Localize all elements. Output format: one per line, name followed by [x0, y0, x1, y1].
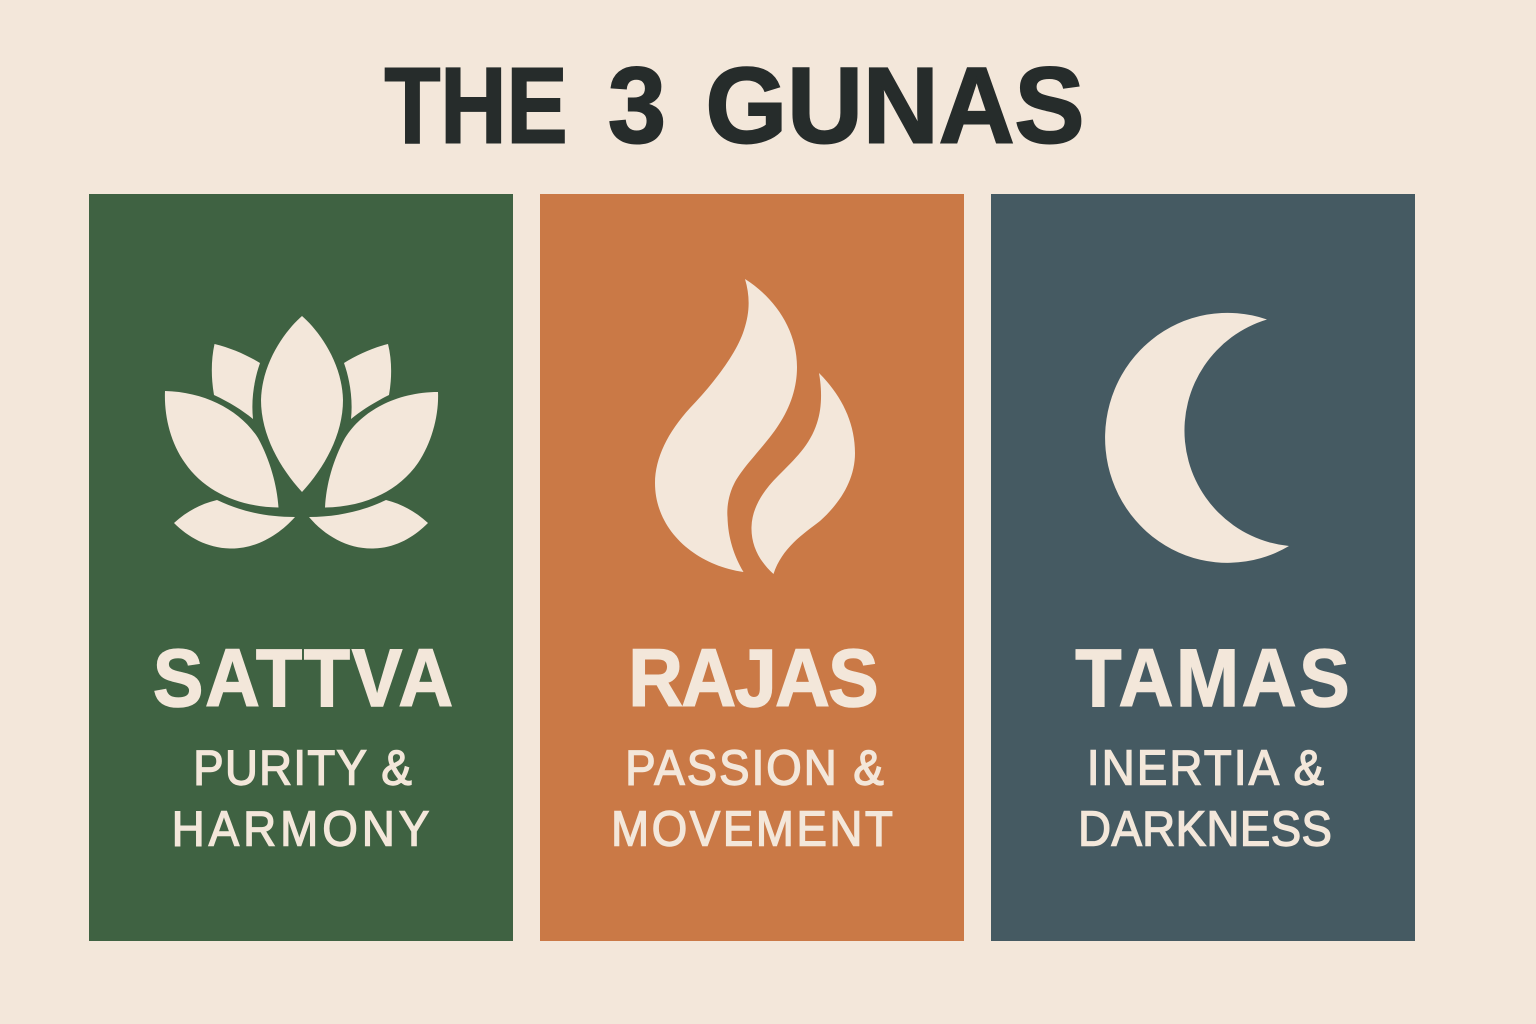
text: purity and harmony: [172, 741, 429, 857]
panel: rajas: [540, 194, 964, 941]
text: passion and movement: [611, 741, 893, 857]
text: inertia and darkness: [1078, 741, 1332, 857]
title: 3: [608, 44, 666, 166]
text: passion and movement: PASSION &: [625, 741, 884, 796]
heading: sattva: SATTVA: [153, 632, 453, 724]
heading: tamas: TAMAS: [1075, 632, 1350, 724]
text: inertia and darkness: INERTIA &: [1087, 741, 1324, 796]
text: purity and harmony: HARMONY: [172, 802, 429, 857]
title: GUNAS: [706, 44, 1084, 166]
icon: crescent moon: [1105, 313, 1289, 563]
text: purity and harmony: PURITY &: [193, 741, 412, 796]
panel: tamas: [991, 194, 1415, 941]
title: [384, 44, 1084, 166]
icon: lotus: [165, 316, 438, 549]
title: THE: [384, 44, 568, 166]
panel: sattva: [89, 194, 513, 941]
text: passion and movement: MOVEMENT: [611, 802, 893, 857]
text: inertia and darkness: DARKNESS: [1078, 802, 1332, 857]
icon: flame: [655, 279, 855, 574]
heading: rajas: RAJAS: [628, 632, 879, 724]
